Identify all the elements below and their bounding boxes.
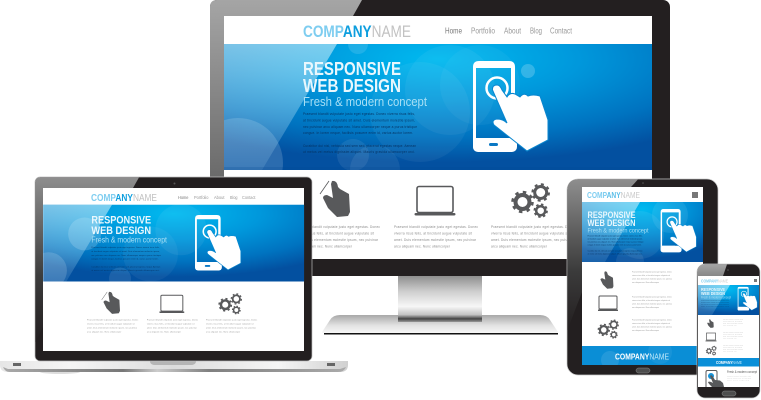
monitor navigation: Blog — [530, 26, 542, 36]
laptop logo: COMPANYNAME — [91, 193, 157, 204]
feature copy columns: amet. Duis elementum molestie ipsum, nec pulvinar — [394, 238, 477, 242]
tablet hero banner: at tincidunt augue vulputate sit amet. Duis elementum molestie ipsum, — [588, 238, 643, 240]
tablet feature copy: Praesent blandit vulputate justo eget egestas. Donec — [632, 318, 672, 322]
tablet feature copy: amet. Duis elementum molestie ipsum, nec pulvinar — [632, 278, 672, 280]
phone screen — [698, 276, 759, 390]
monitor hero banner — [224, 44, 652, 170]
phone hero banner: congue. In lorem neque, facilisis posuere enim id — [701, 306, 729, 308]
tablet hero banner: ut metus vel metus dignissim aliquet. Mauris gravida ullamcorper orci. — [588, 252, 643, 256]
phone feature copy — [723, 318, 743, 353]
monitor stand — [322, 276, 558, 334]
laptop navigation: Blog — [230, 195, 238, 201]
tablet footer band: COMPANYNAME — [615, 352, 669, 362]
laptop feature row: viverra risus felis, at tincidunt augue vulputate sit — [206, 323, 254, 326]
laptop frame — [35, 177, 312, 361]
tablet hero banner: congue. In lorem neque, facilisis posuere enim id, varius auctor lorem. — [588, 244, 642, 246]
tablet hero banner: RESPONSIVE — [588, 210, 636, 220]
phone feature copy: viverra risus felis, at tincidunt — [723, 333, 743, 336]
tablet footer band — [582, 346, 697, 365]
phone menu icon — [754, 279, 757, 282]
promo dark hand — [708, 375, 724, 387]
monitor frame — [210, 0, 670, 276]
tablet feature copy: viverra risus felis, at tincidunt augue vulputate sit — [632, 299, 670, 302]
phone blue band: COMPANYNAME — [716, 360, 742, 365]
hero body copy: at tincidunt augue vulputate sit amet. Duis elementum molestie ipsum, — [303, 118, 415, 122]
phone feature copy: amet. Duis elementum molestie — [723, 322, 743, 325]
laptop hero banner: at tincidunt augue vulputate sit amet. Duis elementum molestie ipsum, — [91, 250, 160, 253]
laptop feature row: amet. Duis elementum molestie ipsum, nec pulvinar — [206, 327, 256, 330]
phone feature copy: Praesent blandit vulputate justo — [723, 331, 743, 334]
tablet feature copy: arcu aliquam nec. Nunc ullamcorper — [632, 330, 659, 332]
tablet feature copy: arcu aliquam nec. Nunc ullamcorper — [632, 282, 659, 284]
laptop hero banner: WEB DESIGN — [91, 225, 151, 237]
hero body copy: ut metus vel metus dignissim aliquet. Mauris gravida ullamcorper orci. — [303, 150, 415, 154]
phone bottom promo: amet. Duis elementum — [727, 378, 749, 382]
tablet icon: hand — [600, 271, 613, 289]
device: smartphone — [697, 264, 760, 398]
feature copy columns: viverra risus felis, at tincidunt augue vulputate sit — [394, 232, 472, 236]
laptop feature row: amet. Duis elementum molestie ipsum, nec pulvinar — [147, 327, 197, 330]
laptop hero banner: ut metus vel metus dignissim aliquet. Mauris gravida ullamcorper orci. — [91, 269, 160, 272]
laptop feature row: arcu aliquam nec. Nunc ullamcorper — [147, 331, 181, 333]
phone features — [706, 318, 743, 355]
laptop navigation: Contact — [242, 195, 256, 201]
tablet logo: COMPANYNAME — [587, 190, 640, 200]
device: tablet — [567, 179, 718, 375]
tablet feature copy: amet. Duis elementum molestie ipsum, nec pulvinar — [632, 302, 672, 306]
phone hero banner — [698, 285, 759, 315]
laptop feature row: viverra risus felis, at tincidunt augue vulputate sit — [147, 323, 195, 326]
monitor navigation — [445, 26, 573, 36]
laptop navigation: About — [214, 195, 225, 201]
hero heading: Fresh & modern concept — [303, 94, 427, 109]
monitor screen — [193, 16, 652, 259]
feature copy columns: viverra risus felis, at tincidunt augue vulputate sit — [296, 232, 374, 236]
phone hero banner: at tincidunt augue vulputate sit amet. Duis elementum — [701, 301, 729, 304]
tablet feature copy: Praesent blandit vulputate justo eget egestas. Donec — [632, 270, 672, 274]
feature copy columns: Praesent blandit vulputate justo eget egestas. Donec — [491, 225, 575, 229]
laptop screen — [30, 188, 304, 351]
phone feature copy: arcu aliquam nec. — [723, 351, 738, 353]
tablet feature copy: Praesent blandit vulputate justo eget egestas. Donec — [632, 296, 672, 298]
phone feature copy: viverra risus felis, at tincidunt — [723, 346, 743, 349]
feature row — [296, 181, 575, 248]
icon: smartphone with tapping hand — [473, 61, 548, 152]
tablet feature copy: viverra risus felis, at tincidunt augue vulputate sit — [632, 274, 670, 277]
tablet screen — [582, 187, 703, 369]
tablet frame — [567, 179, 718, 375]
hero body copy: Curabitur dui nisl, vehicula sed sem sed, placerat egestas neque. Aenean — [303, 144, 416, 148]
phone hero banner: Praesent blandit vulputate justo eget egestas. Donec — [701, 299, 729, 302]
tablet hero banner: Curabitur dui nisl, vehicula sed sem sed, placerat egestas neque. Aenean — [588, 250, 642, 252]
tablet hero banner: WEB DESIGN — [588, 218, 636, 228]
tablet feature copy: viverra risus felis, at tincidunt augue vulputate sit — [632, 322, 670, 325]
phone feature copy: viverra risus felis, at tincidunt — [723, 320, 743, 323]
icon: hand with resize arrow — [320, 181, 350, 217]
phone feature copy: Praesent blandit vulputate justo — [723, 344, 743, 347]
hero body copy: congue. In lorem neque, facilisis posuere enim id, varius auctor lorem. — [303, 131, 413, 135]
feature copy columns — [296, 225, 575, 248]
tablet menu icon — [692, 192, 698, 198]
monitor navigation: Home — [445, 26, 462, 36]
phone hero banner: Fresh & modern concept — [701, 296, 731, 300]
tablet hero banner — [582, 202, 703, 262]
tablet feature copy: arcu aliquam nec. Nunc ullamcorper — [632, 307, 659, 309]
feature copy columns: Praesent blandit vulputate justo eget egestas. Donec — [296, 225, 380, 229]
laptop hero banner: nec pulvinar arcu aliquam nec. Nunc ullamcorper neque a purus tristique — [91, 254, 161, 257]
feature copy columns: arcu aliquam nec. Nunc ullamcorper — [491, 244, 548, 248]
laptop feature row: arcu aliquam nec. Nunc ullamcorper — [87, 331, 122, 333]
phone frame — [697, 264, 760, 398]
feature copy columns: amet. Duis elementum molestie ipsum, nec pulvinar — [296, 238, 379, 242]
hero body copy — [303, 112, 417, 154]
phone bottom promo: Fresh & modern concept — [727, 370, 757, 374]
laptop hero banner: Fresh & modern concept — [91, 235, 168, 244]
hero heading: WEB DESIGN — [303, 76, 401, 96]
laptop hero banner — [43, 204, 304, 282]
phone icon: laptop — [706, 333, 716, 341]
hero body copy: nec pulvinar arcu aliquam nec. Nunc ullamcorper neque a purus tristique — [303, 125, 417, 129]
laptop feature row: Praesent blandit vulputate justo eget egestas. Donec — [147, 319, 198, 322]
laptop base — [0, 361, 348, 374]
tablet feature copy — [632, 270, 672, 332]
hero body copy: Praesent blandit vulputate justo eget egestas. Donec viverra risus felis, — [303, 112, 415, 116]
tablet icon: laptop — [598, 296, 618, 311]
hero heading — [303, 59, 427, 109]
phone feature copy: amet. Duis elementum molestie — [723, 335, 743, 338]
icon: tablet smartphone and hand — [661, 209, 696, 252]
laptop feature row: arcu aliquam nec. Nunc ullamcorper — [206, 331, 241, 333]
laptop hero banner: Praesent blandit vulputate justo eget egestas. Donec viverra risus felis, — [91, 246, 160, 249]
monitor navigation: About — [504, 26, 522, 36]
tablet hero banner: Praesent blandit vulputate justo eget egestas. Donec viverra risus felis, — [588, 234, 643, 238]
tablet features — [598, 270, 672, 338]
laptop hero banner: RESPONSIVE — [91, 215, 151, 227]
monitor logo: COMPANYNAME — [303, 22, 411, 41]
tablet feature copy: amet. Duis elementum molestie ipsum, nec pulvinar — [632, 326, 672, 328]
icon: laptop — [414, 186, 456, 216]
device: laptop — [0, 177, 348, 374]
phone feature copy: arcu aliquam nec. — [723, 338, 738, 340]
monitor navigation: Contact — [550, 26, 573, 36]
laptop feature row — [87, 292, 257, 333]
feature copy columns: arcu aliquam nec. Nunc ullamcorper — [394, 244, 451, 248]
feature copy columns: viverra risus felis, at tincidunt augue vulputate sit — [491, 232, 569, 236]
phone bottom promo — [706, 370, 757, 387]
icon: gears — [512, 184, 549, 217]
laptop navigation: Portfolio — [194, 195, 209, 201]
feature copy columns: amet. Duis elementum molestie ipsum, nec pulvinar — [491, 238, 574, 242]
hero heading: RESPONSIVE — [303, 59, 401, 79]
phone bottom promo: viverra risus felis, at tincidunt — [727, 376, 752, 380]
feature copy columns: Praesent blandit vulputate justo eget egestas. Donec — [394, 225, 478, 229]
device: desktop monitor — [193, 0, 670, 334]
icon: promo phone — [706, 370, 717, 390]
tablet hero banner: Fresh & modern concept — [588, 228, 649, 234]
phone feature copy: amet. Duis elementum molestie — [723, 348, 743, 351]
laptop feature row: Praesent blandit vulputate justo eget egestas. Donec — [206, 319, 257, 322]
phone logo: COMPANYNAME — [701, 278, 728, 284]
tablet icon: gears — [598, 320, 618, 338]
laptop hero banner: Curabitur dui nisl, vehicula sed sem sed, placerat egestas neque. Aenean — [91, 265, 160, 268]
feature copy columns: arcu aliquam nec. Nunc ullamcorper — [296, 244, 353, 248]
phone icon: hand — [707, 319, 714, 328]
icon: phone smartphone and hand — [738, 287, 757, 311]
laptop navigation — [178, 195, 256, 201]
phone hero banner: RESPONSIVE — [701, 287, 725, 292]
monitor navigation: Portfolio — [471, 26, 495, 36]
phone feature copy: Praesent blandit vulputate justo — [723, 318, 743, 321]
phone feature copy: arcu aliquam nec. — [723, 325, 738, 327]
tablet hero banner: nec pulvinar arcu aliquam nec. Nunc ullamcorper neque a purus tristique — [588, 240, 644, 244]
laptop hero banner: congue. In lorem neque, facilisis posuere enim id, varius auctor lorem. — [91, 258, 159, 261]
laptop navigation: Home — [178, 195, 189, 201]
phone icon: gears — [706, 346, 716, 355]
laptop feature row: amet. Duis elementum molestie ipsum, nec pulvinar — [87, 327, 137, 330]
phone bottom promo: Praesent blandit vulputate justo — [727, 374, 751, 378]
phone hero banner: WEB DESIGN — [701, 291, 725, 296]
laptop feature row: viverra risus felis, at tincidunt augue vulputate sit — [87, 323, 135, 326]
laptop feature row: Praesent blandit vulputate justo eget egestas. Donec — [87, 319, 138, 322]
phone hero banner: nec pulvinar arcu aliquam nec. Nunc ullamcorper — [701, 304, 730, 306]
